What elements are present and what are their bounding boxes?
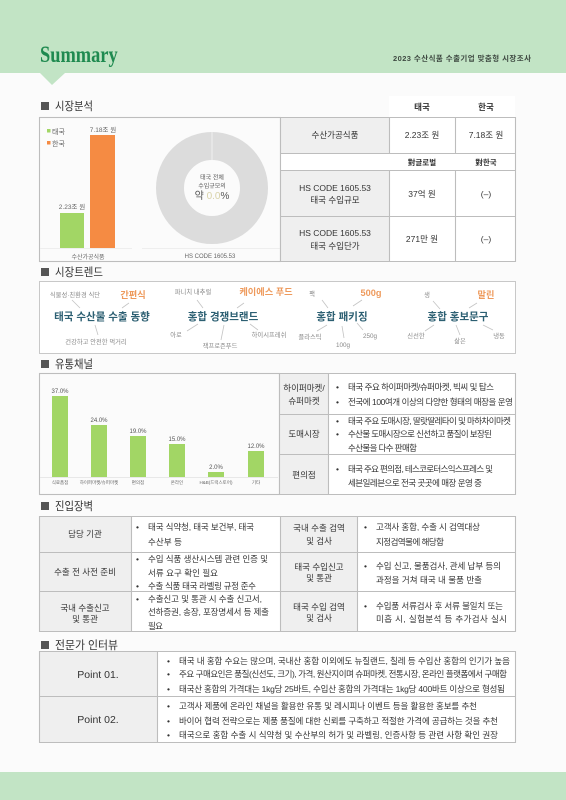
heading: expert interview: 전문가 인터뷰 [55,639,118,652]
table: channels: • [336,397,339,407]
donut chart [142,132,280,260]
keyword cluster: mussel brands: 홍합 경쟁브랜드 [188,310,259,323]
heading: market analysis: 시장분석 [55,100,93,113]
keyword cluster: mussel promotion: 홍합 홍보문구 [428,310,489,323]
keyword cluster: mussel promotion: 삶은 [454,336,466,345]
keyword cluster: mussel packaging: 팩 [309,289,315,298]
keyword cluster: mussel brands: 파니치 내추럴 [175,287,211,296]
donut chart: HS CODE 1605.53 [185,254,236,260]
table: channels: 수산물을 다수 판매함 [348,443,417,453]
table: entry barriers: 필요 [148,621,163,631]
table: channels: 하이퍼마켓/ [283,383,325,393]
panel: channel bar chart [40,374,280,494]
table: expert interview: Point 01. [77,669,119,681]
table: entry barriers: 수출 전 사전 준비 [54,567,116,577]
table: market size: 태국 수입단가 [310,241,360,251]
category labels: 온라인 [171,479,183,486]
keyword cluster: mussel brands: 하이시프레쉬 [252,330,286,339]
keyword cluster: mussel promotion: 말린 [478,289,494,300]
table: expert interview: 태국으로 홍합 수출 시 식약청 및 수산부의 허가 및 라벨링, 인증사항 등 관련 사항 확인 권장 [179,730,498,740]
table: channels: 수산물 도매시장으로 신선하고 품질이 보장된 [348,429,492,439]
table: market size: 한국 [478,102,494,112]
table: entry barriers: 및 검사 [306,536,332,546]
table: expert interview: • [167,730,170,740]
table: expert interview: • [167,684,170,694]
keyword cluster: mussel packaging: 250g [363,333,377,340]
legend [47,128,65,148]
category labels: 하이퍼마켓/슈퍼마켓 [80,479,118,486]
legend: 태국 [52,128,65,136]
keyword cluster: mussel promotion: 생 [424,290,430,299]
keyword cluster: mussel promotion: 냉동 [493,331,505,340]
table: market size: 2.23조 원 [405,130,439,140]
keyword cluster: mussel packaging: 100g [336,342,350,349]
keyword cluster: Thai seafood export: 태국 수산물 수출 동향 [54,310,150,323]
table: market size: 對한국 [475,157,497,167]
table: market size: 7.18조 원 [469,130,503,140]
table: market size: HS CODE 1605.53 [299,228,371,238]
keyword cluster: mussel brands: 케이에스 푸드 [239,286,293,297]
heading: entry barriers [41,500,93,513]
heading: market analysis [41,100,93,113]
table: channels: • [336,382,339,392]
keyword cluster: Thai seafood export: 건강하고 안전한 먹거리 [65,337,127,346]
category labels: 식료품점 [52,479,68,486]
heading: market trends [41,266,103,279]
value labels: 19.0% [129,429,147,435]
table: expert interview: • [167,656,170,666]
keyword cluster: mussel packaging: 500g [361,288,381,298]
category labels: 기타 [252,479,261,486]
keyword cluster: Thai seafood export: 간편식 [120,289,146,300]
table: channels: 세븐일레븐으로 전국 곳곳에 매장 운영 중 [348,478,482,488]
keyword cluster: mussel packaging: 홍합 패키징 [316,310,368,323]
table: entry barriers: • [364,561,367,571]
table: market size: (–) [481,234,491,244]
table: channels: 도매시장 [288,429,320,439]
heading: market trends: 시장트렌드 [55,266,103,279]
table: entry barriers: 고객사 홍합, 수출 시 검역대상 [376,522,480,532]
legend: 한국 [52,140,65,148]
table: channels: 전국에 100여개 이상의 다양한 형태의 매장을 운영 [348,397,513,407]
table: expert interview: • [167,669,170,679]
table: channels: 태국 주요 하이퍼마켓/슈퍼마켓, 빅씨 및 탑스 [348,382,494,392]
panel: market trends [40,282,516,354]
table: entry barriers: • [136,554,139,564]
category labels: 편의점 [132,479,144,486]
report subtitle: 2023 수산식품 수출기업 맞춤형 시장조사 [393,53,531,63]
table: channels: • [336,429,339,439]
table: channels: • [336,416,339,426]
table: entry barriers: 수입 신고, 물품검사, 관세 납부 등의 [376,561,501,571]
value labels: 24.0% [90,418,108,424]
table: entry barriers: 및 통관 [72,614,98,624]
table: expert interview: 주요 구매요인은 품질(신선도, 크기), 가격, 원산지이며 슈퍼마켓, 전통시장, 온라인 플랫폼에서 구매함 [179,669,507,679]
value labels: 2.0% [209,465,223,471]
table: market size: 태국 [414,102,430,112]
donut chart: 수입규모의 [198,182,226,190]
value labels: 12.0% [247,444,265,450]
table: entry barriers: 미흡 시, 실험분석 등 추가검사 실시 [376,614,507,624]
table: entry barriers [39,516,516,632]
table: market size: 태국 수입규모 [310,195,360,205]
table: channels: 편의점 [292,470,316,480]
keyword cluster: mussel promotion: 신선한 [407,331,425,340]
keyword cluster: Thai seafood export: 식물성·친환경 식단 [50,290,100,299]
table: entry barriers: 및 검사 [306,613,332,623]
table: entry barriers: 국내 수출 검역 [293,523,345,533]
table: entry barriers: 담당 기관 [68,529,102,539]
value labels [51,389,265,471]
table: entry barriers: 국내 수출신고 [60,603,110,613]
keyword cluster: Thai seafood export [50,289,150,346]
keyword cluster: mussel packaging [298,288,381,349]
keyword cluster: mussel brands: 잭프로즌푸드 [203,341,238,350]
table: expert interview: • [167,701,170,711]
table: channels: 슈퍼마켓 [288,396,320,406]
table: entry barriers: • [364,522,367,532]
table: entry barriers: • [136,594,139,604]
table: entry barriers: 및 통관 [306,573,332,583]
table: entry barriers: 서류 요구 확인 필요 [148,568,218,578]
heading: entry barriers: 진입장벽 [55,500,93,513]
table: channels: 태국 주요 편의점, 테스코로터스익스프레스 및 [348,464,493,474]
value labels: 15.0% [168,437,186,443]
table: expert interview: Point 02. [77,714,119,726]
table: expert interview: • [167,716,170,726]
keyword cluster: mussel promotion [407,289,505,345]
table: entry barriers: 태국 식약청, 태국 보건부, 태국 [148,522,254,532]
table: expert interview: 태국산 홍합의 가격대는 1kg당 25바트, 수입산 홍합의 가격대는 1kg당 400바트 이상으로 형성됨 [179,684,505,694]
table: entry barriers: 과정을 거쳐 태국 내 물품 반출 [376,575,482,585]
table: expert interview: 바이어 협력 전략으로는 제품 품질에 대한 신뢰를 구축하고 적절한 가격에 공급하는 것을 추천 [179,716,498,726]
bar chart: processed seafood: 2.23조 원 [59,202,85,211]
donut chart: 태국 전체 [200,174,224,182]
table: channels [279,373,516,494]
table: entry barriers: • [136,581,139,591]
donut chart: 약 0.0% [195,190,229,202]
table: entry barriers: 수입품 서류검사 후 서류 불일치 또는 [376,601,503,611]
bars [52,396,264,477]
table: market size: 對글로벌 [408,157,436,167]
table: entry barriers: 수출 식품 태국 라벨링 규정 준수 [148,581,256,591]
table: market size: 수산가공식품 [312,130,359,140]
panel: market analysis charts [40,118,280,262]
bar chart: processed seafood [40,125,132,261]
table: market size: (–) [481,189,491,199]
table: entry barriers: • [136,522,139,532]
table: entry barriers: 수입 식품 생산시스템 관련 인증 및 [148,554,268,564]
table: market size: 271만 원 [406,234,438,244]
footer band [0,772,566,800]
table: entry barriers: 지정검역물에 해당함 [376,537,444,547]
bar chart: processed seafood: 7.18조 원 [90,125,116,134]
table: entry barriers: 선하증권, 송장, 포장명세서 등 제출 [148,607,269,617]
table: market size: HS CODE 1605.53 [299,183,371,193]
title: Summary [40,41,118,68]
table: expert interview: 태국 내 홍합 수요는 많으며, 국내산 홍합 이외에도 뉴질랜드, 칠레 등 수입산 홍합의 인기가 높음 [179,656,510,666]
table: entry barriers: 수산부 등 [148,537,182,547]
category labels: H&B(드럭스토어) [200,479,233,486]
keyword cluster: mussel packaging: 플라스틱 [298,332,322,341]
table: expert interview [39,651,516,742]
category labels [40,478,278,486]
table: entry barriers: • [364,601,367,611]
table: market size: 37억 원 [408,189,436,199]
table: market size [280,96,516,262]
table: entry barriers: 태국 수입신고 [294,562,344,572]
keyword cluster: mussel brands: 아로 [170,330,182,339]
table: channels: • [336,464,339,474]
value labels: 37.0% [51,389,69,395]
table: entry barriers: 태국 수입 검역 [293,602,345,612]
table: entry barriers: 수출신고 및 통관 시 수출 신고서, [148,594,262,604]
table: expert interview: 고객사 제품에 온라인 채널을 활용한 유통 및 레시피나 이벤트 등을 활용한 홍보를 추천 [179,701,477,711]
table: channels: 태국 주요 도매시장, 딸랏딸레타이 및 마하차이마켓 [348,416,511,426]
keyword cluster: mussel brands [170,286,293,350]
header band [0,0,566,85]
heading: distribution channels [41,358,93,371]
bar chart: processed seafood: 수산가공식품 [71,253,105,261]
heading: distribution channels: 유통채널 [55,358,93,371]
